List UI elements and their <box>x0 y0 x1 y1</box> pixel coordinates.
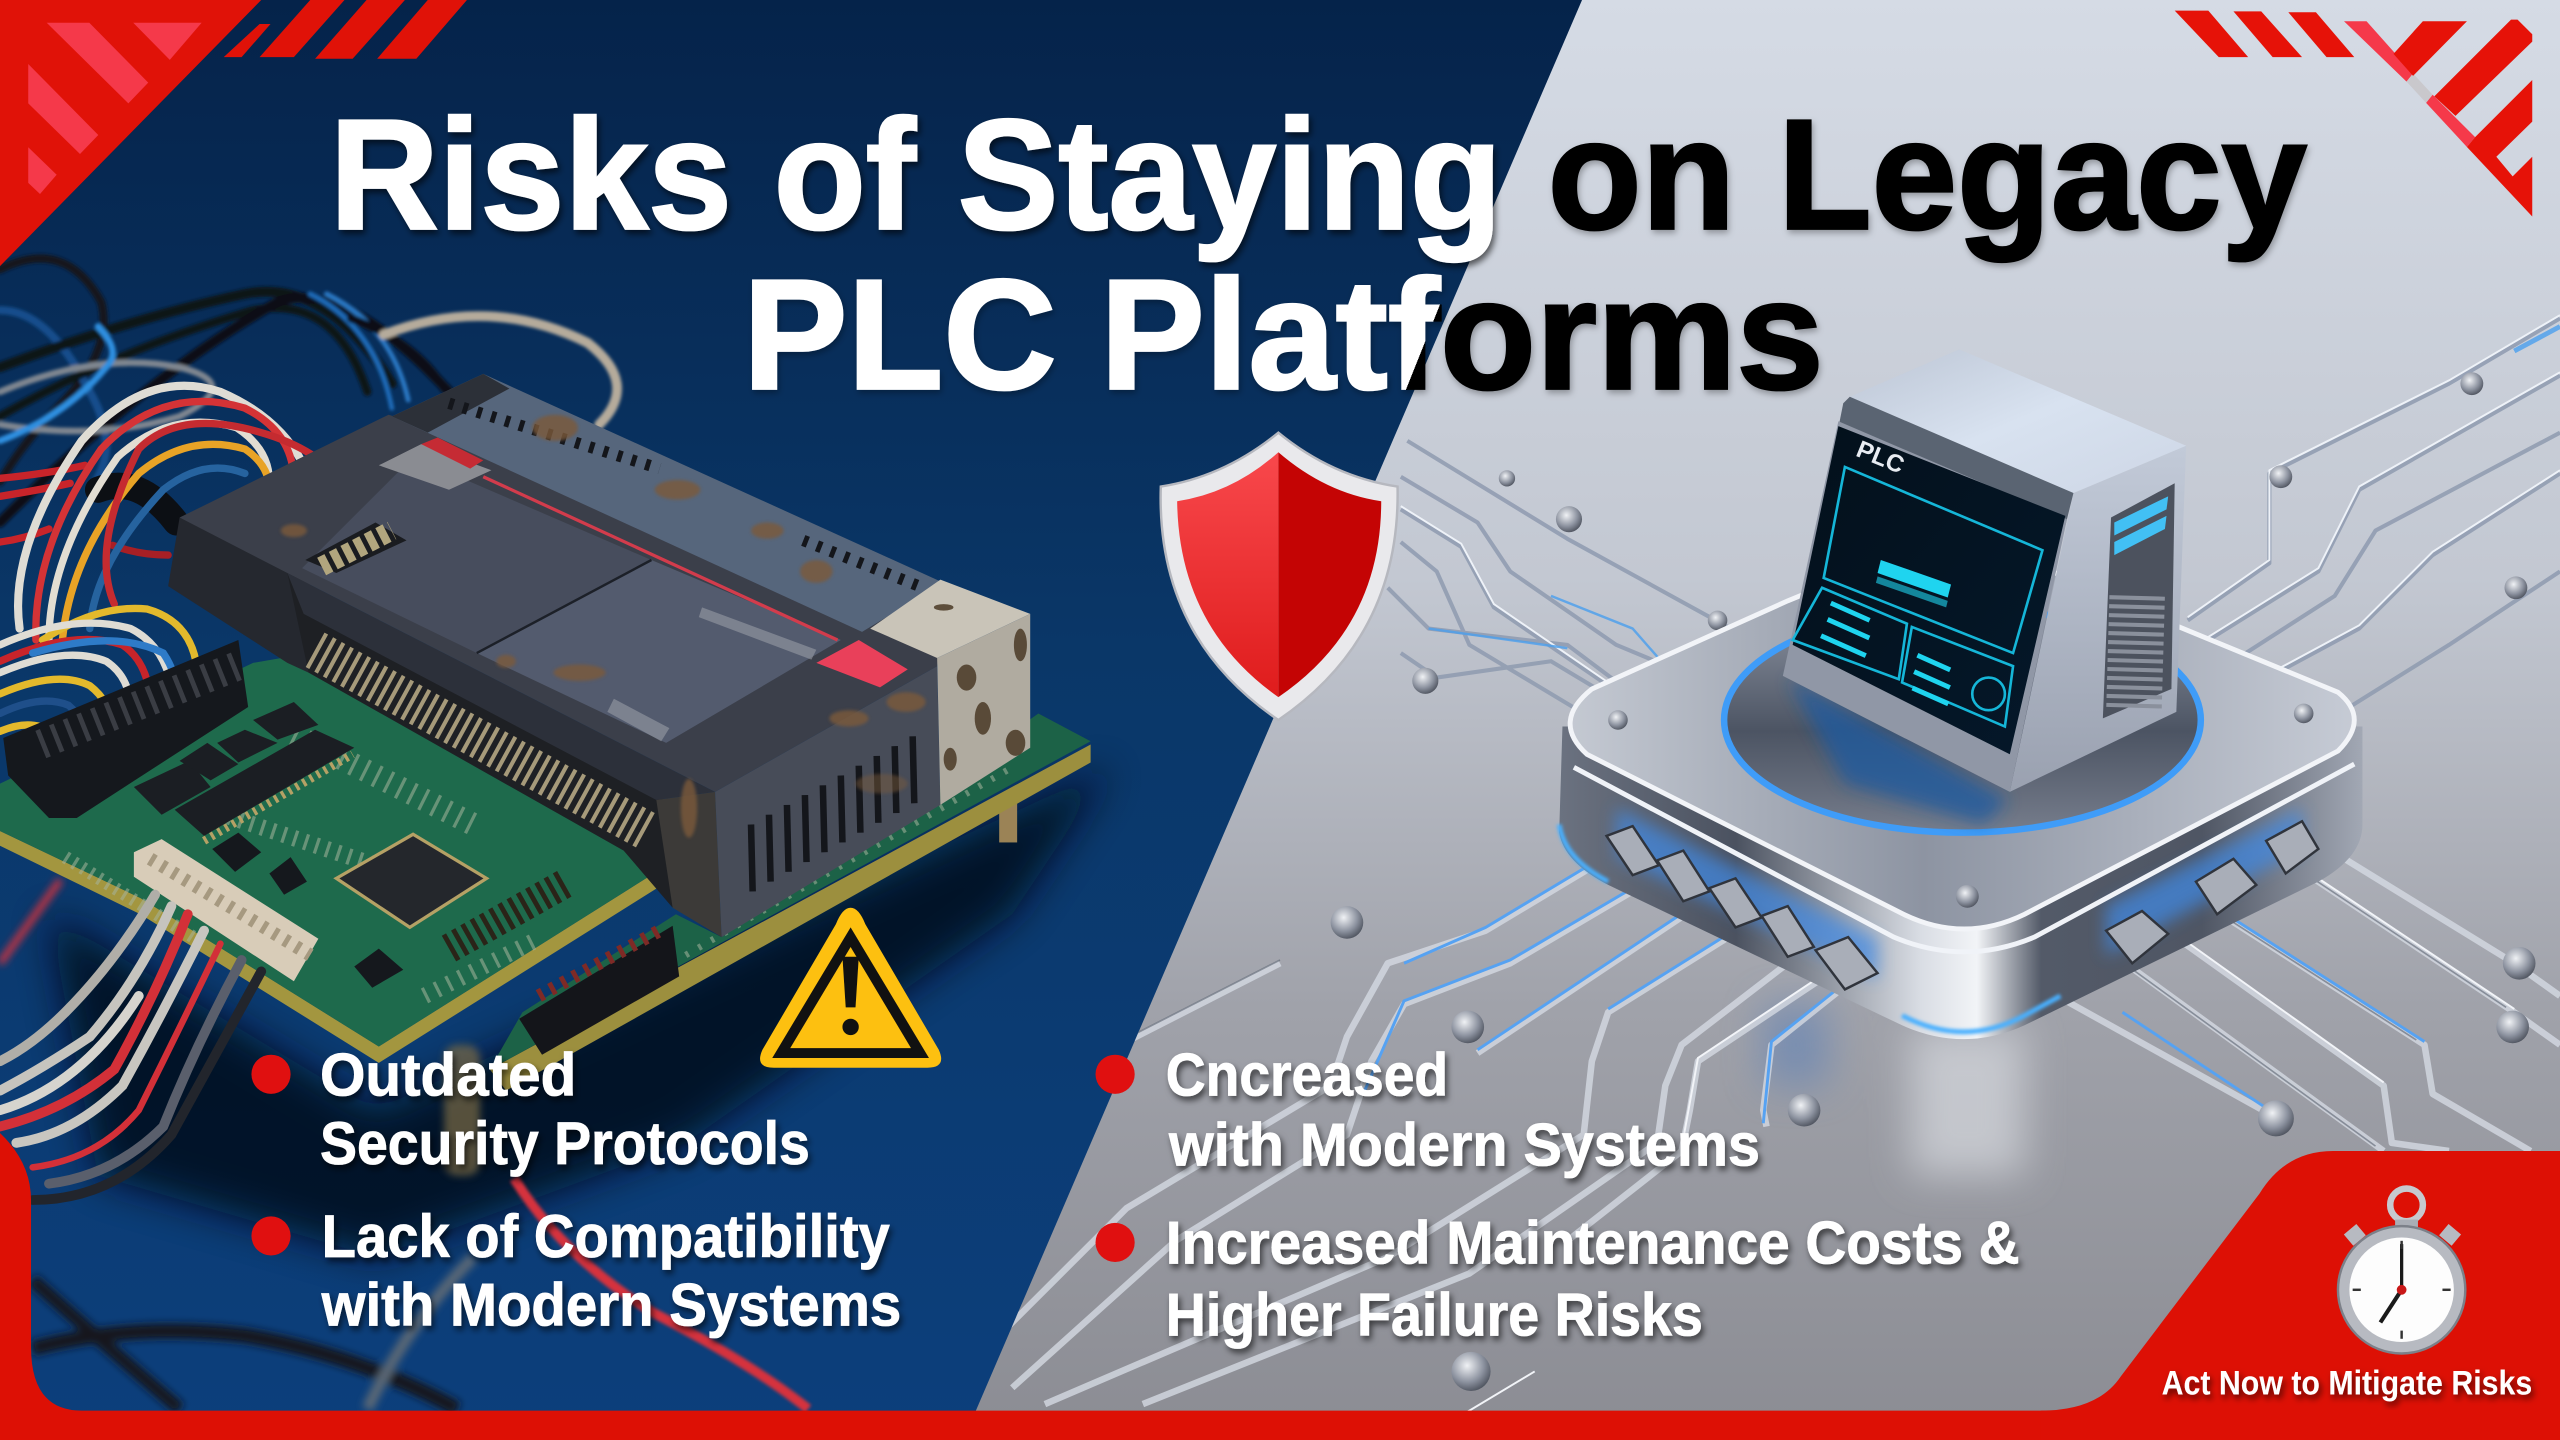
left ports <box>1607 826 1878 989</box>
title: line 2 crossing the split: PLC Platforms <box>743 248 1824 423</box>
side vent light <box>2114 496 2168 536</box>
module top rear panel <box>392 374 944 632</box>
right side: reflection under platform <box>1763 1004 2024 1176</box>
title: white words line 1: Risks of Staying <box>330 88 1502 263</box>
screen label: PLC <box>1852 436 1908 479</box>
small components <box>212 833 403 988</box>
PCB mottling <box>65 735 1012 996</box>
unit screen <box>1793 426 2065 754</box>
bullet text: compatibility: Lack of Compatibility <box>322 1202 890 1270</box>
pin header on PCB <box>449 882 568 949</box>
right side: circuit traces upper <box>1386 314 2560 708</box>
platform top <box>1570 531 2354 929</box>
bullet text: compatibility: with Modern Systems <box>321 1271 901 1339</box>
unit front band <box>1838 397 2073 526</box>
bullet text: increased: with Modern Systems <box>1168 1111 1760 1179</box>
panel <box>2041 1151 2560 1440</box>
bullets: right column <box>1096 1041 2020 1349</box>
bullet text: outdated security: Outdated <box>320 1041 576 1109</box>
icon: security shield <box>1161 433 1398 720</box>
bottom header red pins <box>539 931 660 996</box>
label plate <box>379 444 491 490</box>
unit side <box>2010 446 2186 792</box>
screen bars <box>1820 560 1951 706</box>
right side: solder nodes <box>1331 372 2536 1391</box>
icon: warning triangle <box>760 908 941 1068</box>
red stripe <box>483 477 838 640</box>
icon: stopwatch <box>2338 1189 2465 1353</box>
background: navy left side <box>0 0 1633 1440</box>
call to action panel <box>2041 1151 2560 1440</box>
bullet text: outdated security <box>320 1041 810 1177</box>
top board edge <box>0 831 673 1063</box>
vent slots <box>751 736 914 891</box>
label red bar <box>421 438 483 469</box>
module front face <box>715 666 940 937</box>
connector sockets <box>150 859 310 955</box>
module top surface <box>180 415 944 792</box>
white connector <box>134 839 318 981</box>
rear panel dark band <box>392 374 509 433</box>
main panel right <box>477 560 841 743</box>
bullet dot <box>251 1216 291 1256</box>
main IC <box>336 834 487 927</box>
red corner: top left <box>0 0 467 266</box>
platform lower blue line <box>1559 824 2060 1032</box>
main panel <box>302 457 651 653</box>
coloured wire bundle <box>0 386 346 764</box>
ring reflection <box>1788 678 2008 824</box>
black header connector <box>3 640 248 818</box>
module pins <box>315 650 650 833</box>
background: silver right side <box>963 0 2560 1440</box>
small vent <box>305 522 407 573</box>
bullets: left column <box>251 1041 901 1339</box>
top board <box>0 653 673 1047</box>
black bottom header <box>519 926 679 1055</box>
lower board <box>490 713 1091 1069</box>
bullet dot <box>1096 1223 1135 1262</box>
red cable, out of focus <box>514 1179 808 1409</box>
standoffs <box>999 800 1017 842</box>
unit top <box>1850 349 2186 493</box>
vent grate <box>322 531 392 567</box>
lower board edge <box>490 744 1091 1091</box>
module left strip <box>287 573 715 800</box>
legacy PLC module <box>168 374 1030 937</box>
ring <box>1724 607 2201 833</box>
red label <box>816 640 908 687</box>
bullet text: compatibility <box>321 1202 901 1339</box>
bullet text: outdated security: Security Protocols <box>320 1109 810 1177</box>
module pin field <box>287 573 673 908</box>
title: black words line 1: on Legacy <box>1548 88 2307 263</box>
bullet text: maintenance <box>1166 1209 2020 1349</box>
red frame: bottom and left <box>0 1133 2560 1440</box>
modern platform base <box>1559 531 2362 1039</box>
bullet dot <box>1096 1055 1135 1094</box>
legacy hardware scene <box>0 259 1110 1409</box>
panel text <box>607 607 816 741</box>
DIP chips <box>134 702 354 836</box>
unit front frame <box>1783 421 2067 792</box>
screen UI panels <box>1793 467 2042 727</box>
bullet text: increased: Cncreased <box>1166 1041 1448 1109</box>
bullet dot <box>251 1055 291 1094</box>
board shadow <box>49 767 1110 1257</box>
black rear cables <box>0 259 617 522</box>
rust marks <box>281 415 926 838</box>
corner bolts <box>1608 710 1628 730</box>
red corner: top right <box>2175 11 2532 216</box>
right ports <box>2106 821 2318 963</box>
modern PLC computer unit <box>1783 349 2186 792</box>
platform side <box>1559 727 2362 1039</box>
white module rust <box>934 604 1027 771</box>
platform side blue reflections <box>1616 808 2302 980</box>
front wires <box>0 895 261 1200</box>
side panel <box>2103 483 2175 718</box>
panel seam <box>477 560 651 653</box>
module end block <box>168 518 310 673</box>
bullet text: increased <box>1166 1041 1760 1179</box>
module lower corner <box>656 792 722 937</box>
title <box>330 88 2307 423</box>
white module side <box>937 614 1030 805</box>
right side: circuit traces lower <box>1010 858 2560 1411</box>
side grille <box>2134 596 2137 712</box>
white module <box>870 580 1030 658</box>
header pins <box>41 666 237 744</box>
bullet text: maintenance: Higher Failure Risks <box>1166 1281 1703 1349</box>
platform chrome edge <box>1574 764 2354 952</box>
bullet text: maintenance: Increased Maintenance Costs & <box>1166 1209 2020 1277</box>
blurred foreground cables <box>0 880 473 1409</box>
DIP gold legs <box>204 754 353 841</box>
top vents <box>803 540 919 586</box>
